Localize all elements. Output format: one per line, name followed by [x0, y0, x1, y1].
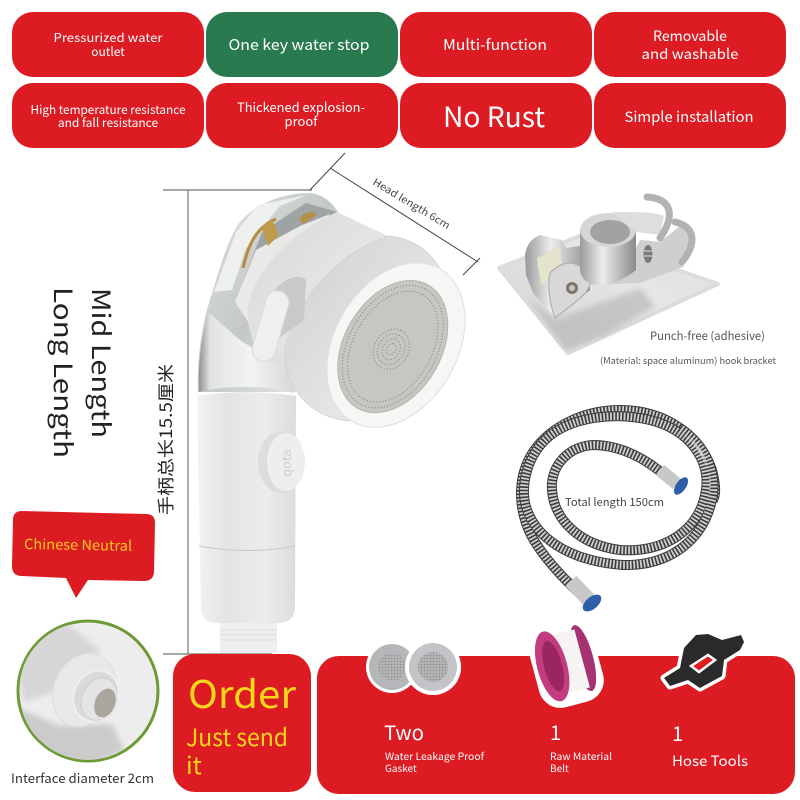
label: long length: Long Length [46, 287, 82, 458]
hook tongue [612, 212, 664, 235]
feature: no rust [400, 83, 592, 148]
accessory: tape text [550, 717, 612, 775]
feature: high temperature resistance [12, 83, 204, 148]
handle body [197, 392, 296, 623]
head face [299, 238, 493, 452]
upper hinge ear [525, 235, 590, 318]
accessory: gasket text [384, 717, 485, 775]
icon: gaskets [366, 639, 461, 695]
side knob [258, 431, 305, 493]
water chamber [199, 312, 294, 393]
feature: high temperature resistance: High temperature resistance [30, 101, 186, 118]
accessory: tool text [672, 718, 748, 771]
hook prongs [647, 197, 692, 262]
hose coil [521, 410, 715, 600]
bracket product [499, 197, 718, 353]
hose product [521, 410, 715, 615]
feature: multi-function [400, 12, 592, 77]
detail circle: interface [14, 618, 158, 768]
accessory: tape text: 1 [550, 717, 561, 746]
accessory: tool text: 1 [672, 718, 683, 747]
handle seam [199, 546, 295, 550]
icon: hose tool [664, 634, 744, 688]
callout: chinese neutral [12, 511, 155, 598]
feature: removable and washable: Removable [653, 26, 727, 46]
hose fittings [571, 470, 691, 615]
slide switch [250, 277, 306, 364]
panel: order: Order [188, 664, 296, 719]
feature: high temperature resistance: and fall resistance [58, 114, 159, 131]
feature: one key water stop: One key water stop [228, 34, 370, 55]
feature: thickened explosion-proof: Thickened explosion- [237, 97, 365, 116]
spray nozzles [322, 267, 464, 426]
label: total length: Total length 150cm [565, 494, 664, 510]
accessory: tool text: Hose Tools [672, 751, 748, 771]
label: punch-free: Punch-free (adhesive) [650, 328, 765, 344]
collar [248, 212, 392, 370]
plate reflection [528, 288, 655, 350]
dimension: handle height [163, 190, 312, 654]
feature: removable and washable [594, 12, 786, 77]
spray plate [315, 261, 470, 432]
panel: accessories [317, 615, 795, 794]
hinge screw [566, 282, 578, 294]
feature: no rust: No Rust [443, 96, 545, 136]
label: handle length: 手柄总长15.5厘米 [152, 364, 177, 515]
feature: pressurized water outlet: Pressurized water [54, 29, 163, 46]
feature: simple installation [594, 83, 786, 148]
accessory: tape text: Belt [550, 760, 569, 775]
accessory: gasket text: Gasket [385, 760, 417, 775]
feature: one key water stop [206, 12, 398, 77]
label: mid length: Mid Length [84, 288, 120, 438]
rim face [299, 238, 493, 452]
crystal facets [214, 195, 307, 292]
internal valve [235, 203, 337, 325]
feature: simple installation: Simple installation [624, 106, 754, 127]
accessory: tape text: Raw Material [550, 748, 612, 763]
feature: multi-function: Multi-function [443, 34, 547, 55]
panel: order: Just send [186, 718, 288, 753]
side knob: qota [276, 449, 295, 477]
adhesive plate [499, 236, 718, 353]
feature: thickened explosion-proof: proof [285, 111, 318, 130]
feature: thickened explosion-proof [206, 83, 398, 148]
panel: order [173, 654, 311, 792]
shower head product [197, 193, 493, 653]
feature: removable and washable: and washable [642, 44, 739, 64]
feature: pressurized water outlet [12, 12, 204, 77]
panel: feature grid [12, 12, 786, 148]
center clip [580, 213, 636, 285]
rim band [285, 236, 440, 421]
callout: chinese neutral: Chinese Neutral [24, 534, 132, 556]
accessory: gasket text: Two [384, 717, 424, 746]
label: bracket material: (Material: space aluminum) hook bracket [600, 354, 777, 367]
front hinge ear [549, 263, 590, 318]
dimension: head length [310, 153, 480, 275]
roller insert [537, 246, 562, 285]
threaded connector [220, 623, 277, 653]
accessory: gasket text: Water Leakage Proof [385, 748, 485, 763]
clear elbow [198, 193, 338, 392]
icon: tape roll [523, 615, 609, 713]
label: interface diameter: Interface diameter 2cm [11, 768, 154, 787]
label: head length: Head length 6cm [370, 174, 454, 232]
panel: order: it [186, 746, 202, 781]
bracket arm [588, 226, 694, 285]
screw [644, 245, 653, 263]
feature: pressurized water outlet: outlet [91, 43, 125, 60]
